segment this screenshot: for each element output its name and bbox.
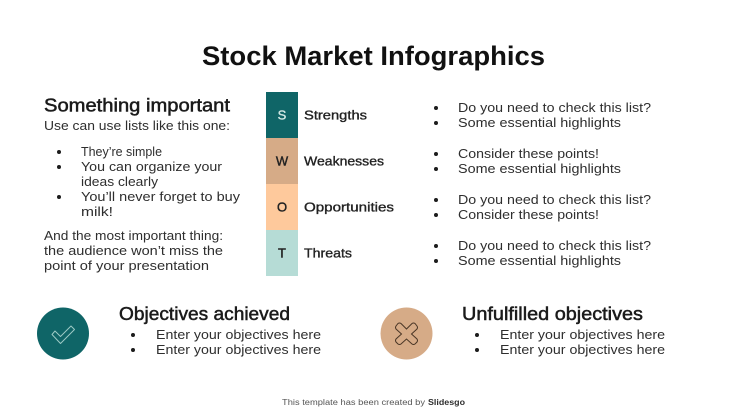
panel: unfulfilled objectives <box>462 304 665 357</box>
panel: SWOT table <box>266 92 395 276</box>
intro line: Use can use lists like this one: <box>44 118 230 133</box>
unfulfilled list: Enter your objectives here <box>500 327 665 342</box>
row: weaknesses <box>266 138 385 184</box>
icon: cross in tan circle <box>380 308 432 360</box>
row: strengths: Strengths <box>304 108 368 122</box>
list: threats notes: Do you need to check this list? <box>458 238 651 253</box>
footer credit <box>282 398 465 407</box>
panel: something important text <box>44 96 241 273</box>
closing paragraph: point of your presentation <box>44 258 209 273</box>
closing paragraph: And the most important thing: <box>44 228 223 243</box>
title: Stock Market Infographics <box>202 41 545 71</box>
list: strengths notes: Do you need to check this list? <box>458 100 651 115</box>
unfulfilled list: Enter your objectives here <box>500 342 665 357</box>
objectives list <box>131 327 321 357</box>
list: opportunities notes <box>434 192 651 222</box>
bullet list: You’ll never forget to buy <box>81 189 241 204</box>
list: weaknesses notes: Consider these points! <box>458 146 599 161</box>
list: weaknesses notes <box>434 146 622 176</box>
unfulfilled list <box>475 327 665 357</box>
row: strengths <box>266 92 368 138</box>
bullet list <box>57 144 241 219</box>
list: threats notes: Some essential highlights <box>458 253 622 268</box>
footer credit: This template has been created by <box>282 398 425 407</box>
row: opportunities: O <box>277 200 287 214</box>
bullet list: ideas clearly <box>81 174 159 189</box>
objectives list: Enter your objectives here <box>156 327 321 342</box>
heading: objectives achieved: Objectives achieved <box>119 304 290 324</box>
row: weaknesses: Weaknesses <box>304 154 385 168</box>
list: threats notes <box>434 238 651 268</box>
icon: check mark in teal circle <box>37 308 89 360</box>
bullet list: They’re simple <box>81 144 162 159</box>
panel: objectives achieved <box>119 304 321 357</box>
list: weaknesses notes: Some essential highlights <box>458 161 622 176</box>
closing paragraph <box>44 228 223 273</box>
list: opportunities notes: Do you need to check this list? <box>458 192 651 207</box>
row: strengths: S <box>278 108 287 122</box>
list: strengths notes <box>434 100 651 130</box>
bullet list: You can organize your <box>81 159 223 174</box>
row: threats: Threats <box>304 246 353 260</box>
heading: unfulfilled objectives: Unfulfilled objectives <box>462 304 643 324</box>
objectives list: Enter your objectives here <box>156 342 321 357</box>
row: opportunities: Opportunities <box>304 200 395 214</box>
bullet list: milk! <box>81 204 113 219</box>
closing paragraph: the audience won’t miss the <box>44 243 223 258</box>
row: weaknesses: W <box>276 154 289 168</box>
row: opportunities <box>266 184 395 230</box>
footer credit: Slidesgo <box>428 398 465 407</box>
row: threats: T <box>278 246 286 260</box>
list: strengths notes: Some essential highlights <box>458 115 622 130</box>
heading: something important: Something important <box>44 96 230 116</box>
row: threats <box>266 230 353 276</box>
list: opportunities notes: Consider these points! <box>458 207 599 222</box>
